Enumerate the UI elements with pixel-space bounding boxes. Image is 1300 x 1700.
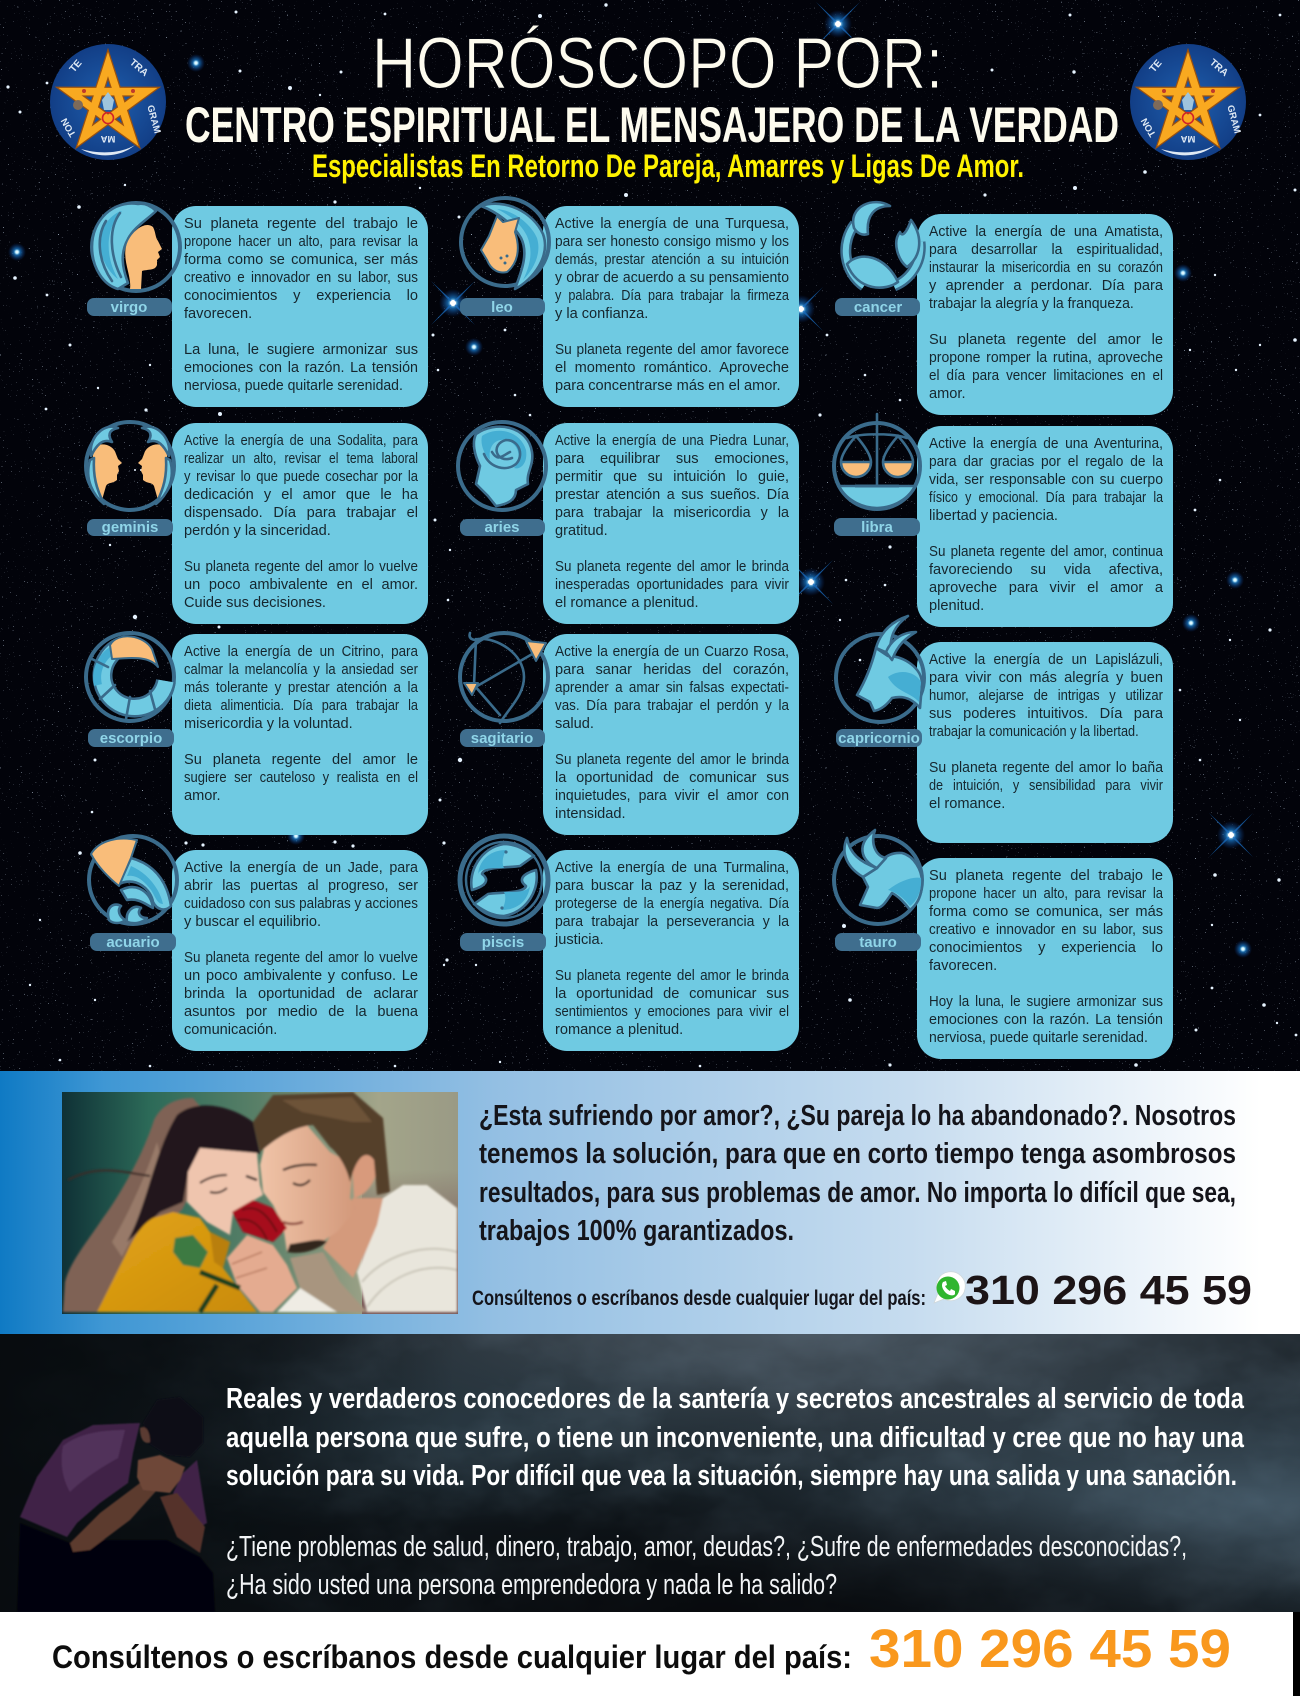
panel: sagitario: para sanar heridas del corazón, <box>555 662 789 678</box>
man face <box>260 1125 357 1252</box>
panel: sagitario: salud. <box>555 716 594 732</box>
panel: leo: el momento romántico. Aproveche <box>555 360 789 376</box>
panel: libra: plenitud. <box>929 598 984 614</box>
icon: tauro: tauro <box>859 934 897 951</box>
panel: escorpio: más tolerante y prestar atención a la <box>184 680 418 696</box>
panel: piscis: la oportunidad de comunicar sus <box>555 986 789 1002</box>
panel: cancer: Su planeta regente del amor le <box>929 332 1163 348</box>
panel: virgo: forma como se comunica, ser más <box>184 252 418 268</box>
tagline: Especialistas En Retorno De Pareja, Amarres y Ligas De Amor. <box>312 148 1024 184</box>
panel: love banner <box>0 1071 1300 1334</box>
panel: capricornio <box>917 642 1173 843</box>
panel: acuario <box>172 850 428 1051</box>
panel: piscis: Su planeta regente del amor le brinda <box>555 968 789 984</box>
icon: leo: leo <box>491 299 513 316</box>
man ear <box>352 1154 377 1198</box>
yellow sweater <box>97 1212 257 1312</box>
icon: geminis <box>86 422 174 536</box>
man sweater <box>357 1185 457 1312</box>
panel: libra: vida, ser responsable con su cuerpo <box>929 472 1163 488</box>
panel: escorpio: Active la energía de un Citrino, para <box>184 644 418 660</box>
panel: leo: y la confianza. <box>555 306 648 322</box>
logo left <box>50 44 166 160</box>
panel: piscis: romance a plenitud. <box>555 1022 683 1038</box>
panel: tauro: forma como se comunica, ser más <box>929 904 1163 920</box>
panel: libra: libertad y paciencia. <box>929 508 1058 524</box>
panel: escorpio <box>172 634 428 835</box>
panel: capricornio: de intuición, y sensibilidad para vivir <box>929 778 1163 794</box>
icon: aries: aries <box>484 519 520 536</box>
panel: acuario: Active la energía de un Jade, para <box>184 860 418 876</box>
santería text: main paragraph <box>226 1383 1245 1492</box>
panel: virgo: La luna, le sugiere armonizar sus <box>184 342 418 358</box>
panel: cancer: y aprender a perdonar. Día para <box>929 278 1163 294</box>
icon: capricornio: capricornio <box>838 730 920 747</box>
panel: aries: Su planeta regente del amor le brinda <box>555 559 789 575</box>
panel: leo: Active la energía de una Turquesa, <box>555 216 789 232</box>
santería text: questions <box>226 1531 1187 1601</box>
footer phone number: 310 296 45 59 <box>869 1619 1231 1679</box>
panel: sagitario: vas. Día para trabajar el perdón y la <box>555 698 789 714</box>
love banner text: trabajos 100% garantizados. <box>479 1215 794 1247</box>
panel: acuario: comunicación. <box>184 1022 277 1038</box>
panel: tauro: favorecen. <box>929 958 997 974</box>
woman face <box>187 1148 263 1235</box>
panel: capricornio: humor, alejarse de intrigas y utilizar <box>929 688 1163 704</box>
panel: virgo: nerviosa, puede quitarle serenidad. <box>184 378 403 394</box>
panel: escorpio: calmar la melancolía y la ansiedad ser <box>184 662 418 678</box>
panel: capricornio: el romance. <box>929 796 1005 812</box>
panel: cancer <box>917 214 1173 415</box>
panel: geminis: dispensado. Día para trabajar el <box>184 505 418 521</box>
panel: virgo: conocimientos y experiencia lo <box>184 288 418 304</box>
panel: cancer: amor. <box>929 386 966 402</box>
panel: leo: y palabra. Día para trabajar la firmeza <box>555 288 789 304</box>
panel: sagitario: la oportunidad de comunicar sus <box>555 770 789 786</box>
panel: libra <box>917 426 1173 627</box>
panel: piscis: para buscar la paz y la serenidad, <box>555 878 789 894</box>
panel: capricornio: sus poderes intuitivos. Día para <box>929 706 1163 722</box>
panel: escorpio: amor. <box>184 788 220 804</box>
panel: virgo: Su planeta regente del trabajo le <box>184 216 418 232</box>
panel: aries <box>543 423 799 624</box>
white cuff <box>277 1288 337 1312</box>
icon: piscis: piscis <box>482 934 524 951</box>
panel: escorpio: sugiere ser cauteloso y realista en el <box>184 770 418 786</box>
panel: geminis <box>172 423 428 624</box>
panel: capricornio: Active la energía de un Lapislázuli, <box>929 652 1163 668</box>
panel: contact footer <box>0 1612 1300 1700</box>
panel: tauro: Hoy la luna, le sugiere armonizar sus <box>929 994 1163 1010</box>
panel: aries: gratitud. <box>555 523 608 539</box>
icon: tauro <box>834 830 922 951</box>
leaf and stem <box>173 1235 208 1268</box>
panel: piscis: para trabajar la perseverancia y la <box>555 914 789 930</box>
panel: piscis <box>543 850 799 1051</box>
icon: acuario: acuario <box>106 934 160 951</box>
title: HORÓSCOPO POR: <box>372 24 943 104</box>
panel: aries: Active la energía de una Piedra Lunar, <box>555 433 789 449</box>
panel: leo: y obrar de acuerdo a su pensamiento <box>555 270 789 286</box>
panel: santería banner <box>0 1334 1300 1612</box>
panel: virgo <box>172 206 428 407</box>
panel: cancer: el día para vencer limitaciones en el <box>929 368 1163 384</box>
icon: libra: libra <box>861 519 893 536</box>
icon: libra <box>834 414 920 536</box>
panel: leo: para concentrarse más en el amor. <box>555 378 781 394</box>
panel: tauro: conocimientos y experiencia lo <box>929 940 1163 956</box>
panel: geminis: un poco ambivalente en el amor. <box>184 577 418 593</box>
panel: sagitario: Su planeta regente del amor le brinda <box>555 752 789 768</box>
icon: piscis <box>460 836 548 951</box>
panel: acuario: abrir las puertas al progreso, ser <box>184 878 418 894</box>
panel: acuario: y buscar el equilibrio. <box>184 914 321 930</box>
panel: aries: prestar atención a sus sueños. Día <box>555 487 789 503</box>
panel: escorpio: Su planeta regente del amor le <box>184 752 418 768</box>
icon: cancer: cancer <box>854 299 902 316</box>
icon: sagitario: sagitario <box>471 730 533 747</box>
santería text: questions: ¿Ha sido usted una persona emprendedora y nada le ha salido? <box>226 1569 837 1601</box>
panel: leo: para ser honesto consigo mismo y los <box>555 234 789 250</box>
panel: sagitario: intensidad. <box>555 806 626 822</box>
panel: virgo: favorecen. <box>184 306 252 322</box>
panel: piscis: protegerse de la energía negativa. Día <box>555 896 789 912</box>
man under-shirt <box>290 1252 367 1312</box>
panel: sagitario: Active la energía de un Cuarzo Rosa, <box>555 644 789 660</box>
icon: virgo <box>87 203 180 316</box>
photo: distressed man <box>17 1397 215 1612</box>
panel: aries: para trabajar la misericordia y la <box>555 505 789 521</box>
consult line: Consúltenos o escríbanos desde cualquier lugar del país: <box>472 1287 926 1310</box>
panel: leo <box>543 206 799 407</box>
icon: leo <box>460 198 549 316</box>
panel: acuario: un poco ambivalente y confuso. Le <box>184 968 418 984</box>
panel: capricornio: para vivir con más alegría y buen <box>929 670 1163 686</box>
footer consult line: Consúltenos o escríbanos desde cualquier lugar del país: <box>52 1639 852 1675</box>
panel: sagitario: inquietudes, para vivir el amor con <box>555 788 789 804</box>
man neck <box>323 1198 383 1278</box>
panel: tauro <box>917 858 1173 1059</box>
panel: sagitario: aprender a amar sin falsas expectati- <box>555 680 789 696</box>
panel: geminis: y revisar lo que puede cosechar por la <box>184 469 418 485</box>
panel: libra: aproveche para vivir el amor a <box>929 580 1163 596</box>
icon: acuario <box>89 836 177 951</box>
panel: tauro: propone hacer un alto, para revisar la <box>929 886 1163 902</box>
icon: virgo: virgo <box>111 299 147 316</box>
icon: whatsapp <box>934 1272 965 1303</box>
panel: piscis: justicia. <box>555 932 604 948</box>
man hair <box>253 1092 390 1195</box>
panel: libra: físico y emocional. Día para trabajar la <box>929 490 1163 506</box>
panel: aries: el romance a plenitud. <box>555 595 699 611</box>
panel: sagitario <box>543 634 799 835</box>
panel: cancer: propone romper la rutina, aproveche <box>929 350 1163 366</box>
panel: piscis: Active la energía de una Turmalina, <box>555 860 789 876</box>
woman hair <box>62 1097 200 1314</box>
panel: leo: demás, prestar atención a su intuición <box>555 252 789 268</box>
panel: escorpio: misericordia y la voluntad. <box>184 716 353 732</box>
panel: acuario: cuidadoso con sus palabras y acciones <box>184 896 418 912</box>
panel: piscis: sentimientos y emociones para vivir el <box>555 1004 789 1020</box>
icon: aries <box>458 422 546 536</box>
panel: cancer: trabajar la alegría y la franqueza. <box>929 296 1134 312</box>
icon: escorpio: escorpio <box>100 730 162 747</box>
icon: geminis: geminis <box>102 519 158 536</box>
icon: cancer <box>835 202 920 316</box>
panel: aries: permitir que su intuición lo guie, <box>555 469 789 485</box>
phone number: 310 296 45 59 <box>965 1267 1252 1313</box>
panel: libra: Su planeta regente del amor, continua <box>929 544 1163 560</box>
panel: cancer: para desarrollar la espiritualidad, <box>929 242 1163 258</box>
panel: virgo: emociones con la razón. La tensión <box>184 360 418 376</box>
panel: geminis: Su planeta regente del amor lo vuelve <box>184 559 418 575</box>
panel: geminis: dedicación y el amor que le ha <box>184 487 418 503</box>
icon: escorpio <box>86 633 174 747</box>
panel: libra: Active la energía de una Aventurina, <box>929 436 1163 452</box>
panel: capricornio: trabajar la comunicación y la libertad. <box>929 724 1139 740</box>
panel: libra: favoreciendo su vida afectiva, <box>929 562 1163 578</box>
panel: geminis: perdón y la sinceridad. <box>184 523 331 539</box>
man features <box>283 1165 317 1185</box>
panel: escorpio: dieta alimenticia. Día para trabajar la <box>184 698 418 714</box>
icon: sagitario <box>460 633 548 747</box>
hand <box>227 1235 297 1312</box>
panel: virgo: propone hacer un alto, para revisar la <box>184 234 418 250</box>
panel: libra: para dar gracias por el regalo de la <box>929 454 1163 470</box>
panel: geminis: realizar un alto, revisar el tema laboral <box>184 451 418 467</box>
panel: cancer: instaurar la misericordia en su corazón <box>929 260 1163 276</box>
love banner text <box>479 1100 1236 1247</box>
panel: virgo: creativo e innovador en su labor, sus <box>184 270 418 286</box>
panel: leo: Su planeta regente del amor favorece <box>555 342 789 358</box>
logo right <box>1130 44 1246 160</box>
rose <box>232 1200 287 1242</box>
icon: capricornio <box>836 616 924 747</box>
panel: aries: inesperadas oportunidades para vivir <box>555 577 789 593</box>
panel: capricornio: Su planeta regente del amor lo baña <box>929 760 1163 776</box>
panel: tauro: creativo e innovador en su labor, sus <box>929 922 1163 938</box>
panel: acuario: Su planeta regente del amor lo vuelve <box>184 950 418 966</box>
panel: geminis: Active la energía de una Sodalita, para <box>184 433 418 449</box>
panel: aries: para equilibrar sus emociones, <box>555 451 789 467</box>
panel: tauro: Su planeta regente del trabajo le <box>929 868 1163 884</box>
panel: tauro: emociones con la razón. La tensión <box>929 1012 1163 1028</box>
panel: acuario: brinda la oportunidad de aclarar <box>184 986 418 1002</box>
panel: cancer: Active la energía de una Amatista, <box>929 224 1163 240</box>
panel: acuario: asuntos por medio de la buena <box>184 1004 418 1020</box>
photo: couple with rose <box>62 1092 458 1314</box>
panel: tauro: nerviosa, puede quitarle serenidad. <box>929 1030 1148 1046</box>
panel: geminis: Cuide sus decisiones. <box>184 595 326 611</box>
